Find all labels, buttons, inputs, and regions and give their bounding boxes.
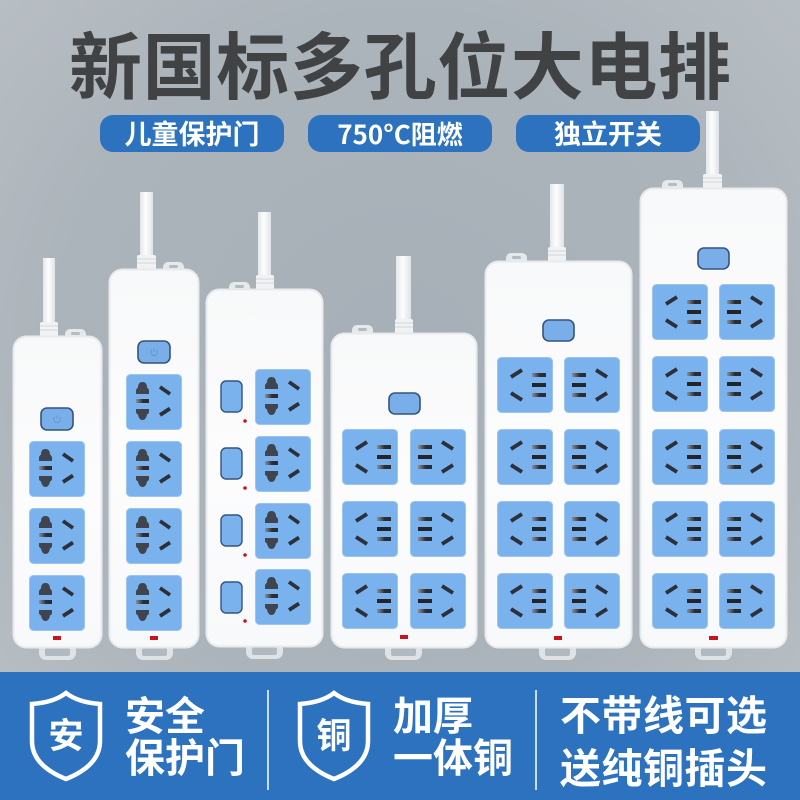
pill: independent switch [516,113,700,152]
icon: shield copper: 铜 [316,708,352,759]
text: thick copper: 加厚 [393,684,473,742]
power strip 1: three sockets [14,258,102,660]
icon: shield safe: 安 [48,708,84,759]
text: safety door [125,684,245,784]
text: safety door: 保护门 [125,726,245,784]
power strip 5: eight sockets [486,184,632,660]
feature pills [100,113,700,152]
title: 新国标多孔位大电排 [69,9,731,115]
power strip 3: four sockets with individual switches [206,212,322,659]
pill: flame retardant [308,115,492,152]
text: thick copper [393,684,513,784]
power strip 6: ten sockets [640,111,786,660]
text: cordless option: 不带线可选 [560,682,768,742]
text: thick copper: 一体铜 [393,726,513,784]
footer band [0,672,800,800]
pill: child safety door: 儿童保护门 [124,113,260,152]
text: cordless option [560,682,768,795]
power strip 4: six sockets [332,256,476,660]
icon: shield copper [300,693,368,779]
power strip 2: four sockets [110,192,198,660]
text: safety door: 安全 [125,684,205,742]
pill: independent switch: 独立开关 [554,113,662,152]
text: cordless option: 送纯铜插头 [560,735,768,795]
pill: flame retardant: 750°C阻燃 [337,115,463,152]
icon: shield safe [32,693,100,779]
